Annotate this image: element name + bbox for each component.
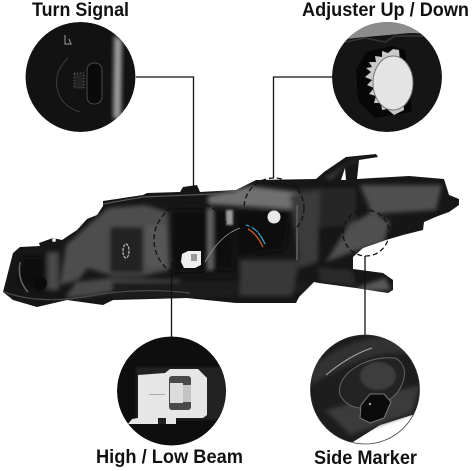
wires bbox=[205, 225, 265, 262]
label: Side Marker: Side Marker bbox=[314, 448, 418, 469]
lens bracket top rim bbox=[103, 193, 236, 204]
detail circle: high low beam bbox=[117, 336, 226, 446]
label: Adjuster Up / Down: Adjuster Up / Down bbox=[302, 0, 469, 21]
detail circle: turn signal bbox=[26, 22, 136, 132]
mounting tab highlight bbox=[52, 238, 56, 242]
detail circle: side marker bbox=[310, 334, 420, 444]
connector plug bbox=[181, 251, 201, 268]
headlight assembly bbox=[3, 154, 459, 307]
window under bracket bbox=[341, 168, 346, 180]
leader lines bbox=[136, 77, 365, 337]
detail circle: adjuster bbox=[332, 22, 442, 132]
label: Turn Signal: Turn Signal bbox=[32, 0, 129, 21]
dashed callout circles bbox=[154, 178, 389, 278]
small arrow marking bbox=[123, 244, 129, 258]
adjuster socket bbox=[268, 210, 280, 224]
label: High / Low Beam: High / Low Beam bbox=[96, 447, 243, 468]
